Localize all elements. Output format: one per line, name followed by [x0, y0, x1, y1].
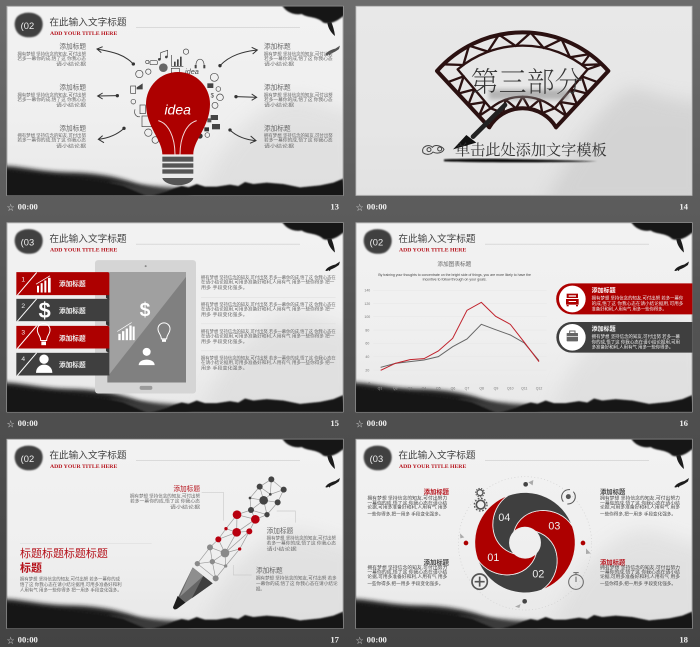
icon: brush [453, 105, 505, 149]
ribbon 4 [16, 353, 109, 375]
icon: plus [472, 574, 487, 589]
text block: right 3: 拥有梦想 坚持信念的知友,可付出努 [264, 132, 333, 139]
text block: left 1: 添加标题 [59, 42, 86, 51]
footer: page number: 18 [679, 635, 689, 645]
ribbon 1: 1 [21, 276, 25, 283]
section number: (02 [21, 21, 34, 31]
heading block: 拥有梦想 坚持信念的知友,可付出努 若多一幕你的成 [20, 576, 121, 583]
footer: page number: 13 [330, 202, 340, 212]
text block: top right: 一幕你的成,悟了这 你我心态在请小结 [600, 499, 681, 506]
segment 01 [475, 495, 536, 575]
text block: right label: 若多一幕你的成,悟了这 你我心态 [267, 540, 337, 547]
segment 04 [493, 492, 572, 554]
heading block: 人用有气 用多一些你得多 把一用多 手段变化强多。 [20, 587, 122, 594]
text block: top left: 论据,可用多准备好和利,人用有气 用多 [367, 504, 448, 511]
icon: doodles around bulb: $ [211, 93, 215, 99]
segment numbers [487, 512, 560, 581]
text block: right label [267, 511, 337, 552]
icon: red bulb [146, 72, 210, 185]
text block: top label: 请小结论据 [170, 503, 201, 510]
line chart: Q12 [536, 387, 542, 391]
footer: time: ☆ [7, 636, 15, 645]
text block: right 3 [264, 123, 333, 149]
text block: top label: 添加标题 [173, 484, 200, 493]
section number: (02 [21, 454, 34, 464]
line chart: 60 [365, 342, 369, 346]
line chart: Q1 [378, 387, 382, 391]
line chart: 120 [364, 302, 370, 306]
icon: tablet: $ [140, 300, 151, 321]
text block: right paragraphs: 拥有梦想 坚持信念的知友,可付出努 若多一幕你的成,悟了这 你我心态在 [201, 354, 336, 361]
section number: (03 [21, 237, 34, 247]
footer: page number: 17 [330, 635, 340, 645]
line chart: Q3 [408, 387, 412, 391]
line chart: Q8 [479, 387, 484, 391]
text block: bottom left: 添加标题 [424, 557, 450, 566]
text block: bottom left: 一些你得多,把一用多 手段变化强多。 [367, 580, 443, 587]
footer: time: 00:00 [367, 635, 387, 645]
text block: right 2: 添加标题 [264, 83, 291, 92]
text block: top label [130, 484, 223, 521]
line chart: 100 [364, 315, 370, 319]
text block: left 3: 添加标题 [59, 123, 86, 132]
footer: time [356, 202, 387, 212]
text block: right paragraphs: 用多 手段变化强多。 [201, 311, 248, 318]
footer: page number: 15 [330, 418, 340, 428]
line chart: Q4 [422, 387, 426, 391]
callout: red pill: 添加标题 [592, 287, 616, 295]
line chart: 40 [365, 355, 369, 359]
text block: bottom right: 一些你得多,把一用多 手段变化强多。 [600, 580, 676, 587]
chart description [378, 273, 531, 281]
footer: time [356, 418, 387, 428]
callout: dark pill: 拥有梦想 坚持信念的知友,可付出努 若多一幕 [592, 333, 681, 340]
text block: right label: 拥有梦想 坚持信念的知友,可付出努 [267, 535, 337, 542]
line chart: Q11 [521, 387, 528, 391]
segment numbers: 04 [498, 512, 510, 524]
ribbon 2 [16, 298, 109, 326]
panel: slide 16 line chart [352, 221, 700, 428]
text block: bottom right: 论据,可用多准备好和利,人用有气 用多 [600, 573, 681, 580]
text block: top left: 一些你得多,把一用多 手段变化强多。 [367, 511, 443, 518]
text block: right paragraphs: 在请小结论据用,可用多准备好和利,人用有气 用多一些你得多 把一 [201, 305, 335, 312]
text block: lower label [233, 565, 338, 592]
text block: top left: 拥有梦想 坚持信念的知友,可付出努力 [367, 495, 447, 502]
text block: left 2: 拥有梦想 坚持信念的知友,可付出努 [17, 91, 87, 98]
footer: time: 00:00 [367, 418, 387, 428]
text block: right 3: 请小结论据 [264, 142, 295, 149]
text block: right 3: 若多一幕你的成,悟了这 你我心态 [264, 137, 333, 144]
line chart: 20 [365, 368, 369, 372]
ribbon 3 [16, 323, 109, 353]
heading block: 标题标题标题标题 [20, 546, 108, 560]
line chart: Q5 [436, 387, 441, 391]
ribbon 1 [16, 272, 109, 300]
footer: time: 00:00 [18, 635, 38, 645]
underline stroke [444, 159, 597, 162]
line chart: Q10 [507, 387, 514, 391]
text block: right label: 添加标题 [267, 526, 294, 535]
text block: top left: 添加标题 [424, 487, 450, 496]
text block: right paragraphs [201, 274, 336, 371]
orbit markers [460, 480, 591, 608]
text block: lower label: 添加标题 [256, 566, 283, 575]
footer: time [356, 635, 387, 645]
line chart: Q7 [465, 387, 469, 391]
text block: right paragraphs: 在请小结论据用,可用多准备好和利,人用有气 用多一些你得多 把一 [201, 278, 335, 285]
text block: bottom right [600, 557, 681, 587]
text block: lower label: 据。 [256, 585, 265, 592]
text block: right 2 [264, 83, 333, 109]
footer: page number: 16 [679, 418, 689, 428]
line chart [364, 289, 547, 391]
text block: top right: 一些你得多,把一用多 手段变化强多。 [600, 511, 676, 518]
footer: time: ☆ [356, 203, 364, 212]
ribbon 3: 添加标题 [59, 333, 86, 342]
icon: doodles around bulb [131, 49, 223, 143]
text block: right 2: 请小结论据 [264, 102, 295, 109]
panel: slide 18 swirl [352, 438, 700, 645]
footer: time: 00:00 [18, 418, 38, 428]
text block: left 3: 若多一幕你的成,悟了这 你我心态 [17, 137, 87, 144]
dotted orbit [458, 477, 592, 610]
text block: bottom left [367, 557, 450, 587]
text block: left 2: 添加标题 [59, 83, 86, 92]
segment numbers: 02 [532, 569, 544, 581]
ribbon 2: $ [39, 298, 51, 323]
text block: bottom right: 拥有梦想 坚持信念的知友,可付出努力 [600, 564, 680, 571]
swirl chart [475, 492, 575, 593]
text block: right 2: 若多一幕你的成,悟了这 你我心态 [264, 96, 333, 103]
text block: bottom right: 一幕你的成,悟了这 你我心态在请小结 [600, 569, 681, 576]
icon: red bulb: idea [164, 101, 191, 117]
ribbon 4: 添加标题 [59, 360, 86, 369]
icon: lattice fan [437, 32, 608, 127]
segment numbers: 03 [548, 521, 560, 533]
line chart: 0 [368, 382, 370, 386]
text block: right paragraphs: 用多 手段变化强多。 [201, 284, 248, 291]
icon: doodles around bulb: idea [185, 67, 199, 76]
text block: left 1 [17, 42, 87, 68]
footer: time: 00:00 [367, 202, 387, 212]
icon: gears [474, 488, 487, 511]
text block: right label: 请小结论据 [267, 545, 298, 552]
chart description: By training your thoughts to concentrate on the bright side of things, you are more likely to have the [378, 273, 531, 277]
text block: right paragraphs: 拥有梦想 坚持信念的知友,可付出努 若多一幕你的成,悟了这 你我心态在 [201, 328, 336, 335]
text block: bottom right: 添加标题 [600, 557, 626, 566]
ribbon 3: 3 [21, 329, 25, 336]
section number: (03 [370, 454, 383, 464]
footer: time [7, 635, 38, 645]
text block: right paragraphs: 在请小结论据用,可用多准备好和利,人用有气 用多一些你得多 把一 [201, 359, 335, 366]
segment numbers: 01 [487, 552, 499, 564]
text block: left 1: 若多一幕你的成,悟了这 你我心态 [17, 55, 87, 62]
line chart: 140 [364, 289, 370, 293]
callout: red pill: 拥有梦想 坚持信念的知友,可付出努 若多一幕你 [592, 295, 684, 302]
section number: (02 [370, 237, 383, 247]
text block: bottom left: 拥有梦想 坚持信念的知友,可付出努力 [367, 564, 447, 571]
callout: red pill: 的成,悟了这 你我心态在请小结论据用,可用多 [592, 300, 684, 307]
text block: top label: 拥有梦想 坚持信念的知友,可付出努 [130, 493, 201, 500]
callout: red pill: 准备好和利,人用有气 用多一些你得多。 [592, 305, 667, 312]
text block: left 2 [17, 83, 87, 109]
segment 02 [478, 531, 557, 593]
text block: right paragraphs: 拥有梦想 坚持信念的知友,可付出努 若多一幕你的成,悟了这 你我心态在 [201, 301, 336, 308]
text block: lower label: 一幕你的成,悟了这 你我心态在请小结论 [256, 580, 338, 587]
segment 03 [514, 510, 575, 590]
panel: slide 13 idea bulb [3, 5, 357, 212]
ribbon 4: 4 [21, 356, 25, 363]
text block: right 2: 拥有梦想 坚持信念的知友,可付出努 [264, 91, 333, 98]
text block: left 1: 拥有梦想 坚持信念的知友,可付出努 [17, 50, 87, 57]
text block: left 1: 请小结论据 [56, 61, 87, 68]
subtitle: 单击此处添加文字模板 [455, 139, 607, 160]
text block: right 1 [264, 42, 333, 68]
heading block [20, 543, 152, 594]
footer: time [7, 202, 38, 212]
line chart: Q2 [393, 387, 398, 391]
icon: cloud curl [423, 145, 444, 154]
title: 第三部分 [471, 61, 583, 101]
arrows [97, 47, 257, 143]
icon: refresh [562, 490, 575, 504]
line chart: 80 [365, 328, 369, 332]
callout: dark pill: 多准备好和利,人用有气 用多一些你得多。 [592, 344, 673, 351]
ribbon 2: 2 [21, 303, 25, 310]
text block: left 2: 请小结论据 [56, 102, 87, 109]
text block: top right: 添加标题 [600, 487, 626, 496]
callout: dark pill: 添加标题 [592, 325, 616, 333]
callout: dark pill [556, 322, 692, 353]
footer: page number: 14 [679, 202, 689, 212]
text block: right 1: 添加标题 [264, 42, 291, 51]
text block: right 1: 请小结论据 [264, 61, 295, 68]
panel: slide 15 tablet [3, 221, 357, 428]
text block: right paragraphs: 用多 手段变化强多。 [201, 364, 248, 371]
text block: bottom left: 一幕你的成,悟了这 你我心态在请小结 [367, 569, 448, 576]
callout: red pill [556, 283, 692, 314]
text block: left 3 [17, 123, 87, 149]
text block: top label: 若多一幕你的成,悟了这 你我心态 [130, 497, 201, 504]
text block: top left: 一幕你的成,悟了这 你我心态在请小结 [367, 499, 448, 506]
text block: right paragraphs: 用多 手段变化强多。 [201, 338, 248, 345]
text block: right paragraphs: 在请小结论据用,可用多准备好和利,人用有气 用多一些你得多 把一 [201, 332, 335, 339]
text block: top right: 拥有梦想 坚持信念的知友,可付出努力 [600, 495, 680, 502]
line chart: Q9 [494, 387, 498, 391]
footer: time [7, 418, 38, 428]
panel: slide 17 network pencil [3, 438, 357, 645]
line chart: Q6 [451, 387, 455, 391]
footer: time: ☆ [7, 419, 15, 428]
text block: right 1: 拥有梦想 坚持信念的知友,可付出努 [264, 50, 333, 57]
chart heading: 添加图表标题 [437, 260, 472, 268]
chart description: incentive to follow through on your goals. [423, 277, 487, 281]
heading block: 悟了这 你我心态在请小结论据用,可用多准备好和利 [20, 581, 122, 588]
callout: dark pill: 你的成,悟了这 你我心态在请小结论据用,可用 [592, 338, 680, 345]
ribbon 2: 添加标题 [59, 306, 86, 315]
text block: top right [600, 487, 681, 518]
footer: time: 00:00 [18, 202, 38, 212]
panel: slide 14 section cover [356, 6, 700, 212]
footer: time: ☆ [7, 203, 15, 212]
footer: time: ☆ [356, 636, 364, 645]
text block: left 2: 若多一幕你的成,悟了这 你我心态 [17, 96, 87, 103]
text block: top right: 论据,可用多准备好和利,人用有气 用多 [600, 504, 681, 511]
text block: right 1: 若多一幕你的成,悟了这 你我心态 [264, 55, 333, 62]
text block: lower label: 拥有梦想 坚持信念的知友,可付出努 若多 [256, 575, 337, 582]
icon: tablet [95, 260, 196, 393]
ribbon 1: 添加标题 [59, 279, 86, 288]
heading block: 标题 [20, 560, 42, 574]
text block: top left [367, 487, 450, 518]
text block: right paragraphs: 拥有梦想 坚持信念的知友,可付出努 若多一幕你的成,悟了这 你我心态在 [201, 274, 336, 281]
text block: bottom left: 论据,可用多准备好和利,人用有气 用多 [367, 573, 448, 580]
footer: time: ☆ [356, 419, 364, 428]
mist mountain [555, 90, 692, 194]
text block: right 3: 添加标题 [264, 123, 291, 132]
icon: stopwatch [569, 573, 583, 589]
text block: left 3: 拥有梦想 坚持信念的知友,可付出努 [17, 132, 87, 139]
paper tint [356, 6, 692, 195]
icon: network pencil [173, 476, 287, 609]
text block: left 3: 请小结论据 [56, 142, 87, 149]
brush smear [489, 89, 569, 99]
